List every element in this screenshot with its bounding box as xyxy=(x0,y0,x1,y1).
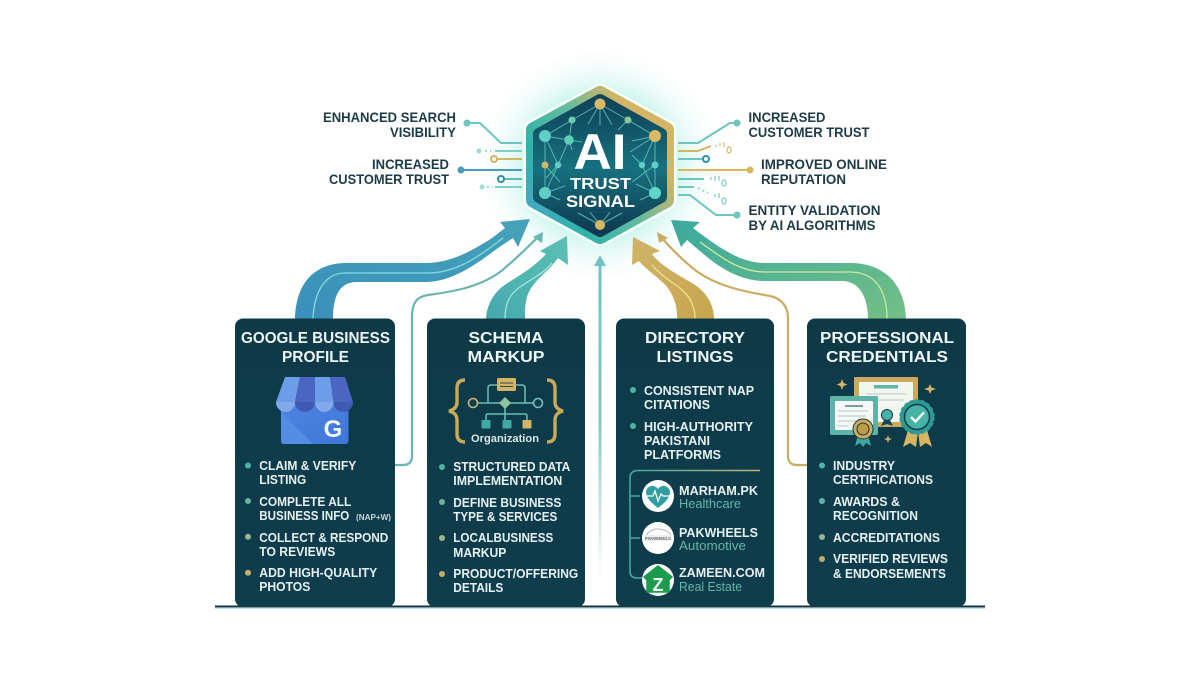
panel: Google Business Profile xyxy=(235,318,395,607)
left outcome labels: ENHANCED SEARCH xyxy=(323,109,456,125)
icon: Google storefront: G xyxy=(324,416,342,443)
arrow: thin gold connector to Credentials card xyxy=(657,232,807,465)
heading: CREDENTIALS xyxy=(826,349,948,366)
bullet list: PHOTOS xyxy=(259,579,311,594)
badge text: AI xyxy=(574,124,626,180)
heading: PROFILE xyxy=(282,349,349,366)
right outcome labels: INCREASED xyxy=(748,109,826,125)
bullet list: PLATFORMS xyxy=(644,447,721,462)
right outcome labels xyxy=(748,109,887,233)
bullet list: DEFINE BUSINESS xyxy=(453,495,562,510)
arrow: thin teal connector from Google card xyxy=(395,232,543,465)
panel: Professional Credentials xyxy=(807,318,966,607)
arrow: Directory Listings to hexagon xyxy=(632,237,714,319)
icon: Zameen logo: Z xyxy=(652,575,664,595)
icon: schema diagram xyxy=(449,378,563,445)
text: Zameen: ZAMEEN.COM xyxy=(679,565,765,580)
heading xyxy=(468,330,545,366)
bullet list: STRUCTURED DATA xyxy=(453,459,571,474)
panel: Schema Markup xyxy=(427,318,585,607)
right outcome labels: REPUTATION xyxy=(761,171,846,187)
text: Zameen xyxy=(679,565,765,594)
left outcome labels: CUSTOMER TRUST xyxy=(329,171,449,187)
right outcome labels: ENTITY VALIDATION xyxy=(748,202,880,218)
bullet list: CONSISTENT NAP xyxy=(644,383,754,398)
bullet list: ADD HIGH-QUALITY xyxy=(259,565,378,580)
left outcome labels xyxy=(323,109,457,187)
right circuit lines xyxy=(678,120,754,218)
heading: MARKUP xyxy=(468,349,545,366)
bullet list: INDUSTRY xyxy=(833,458,895,473)
arrow: Schema Markup to hexagon xyxy=(486,236,568,319)
bullet list xyxy=(439,459,578,595)
right outcome labels: CUSTOMER TRUST xyxy=(748,124,870,140)
left outcome labels: VISIBILITY xyxy=(390,124,457,140)
icon: Marham heart xyxy=(642,480,674,512)
bullet list xyxy=(630,383,754,462)
bullet list: CERTIFICATIONS xyxy=(833,472,933,487)
bullet list: TYPE & SERVICES xyxy=(453,509,558,524)
heading: SCHEMA xyxy=(468,330,544,347)
bullet list: COMPLETE ALL xyxy=(259,494,351,509)
right outcome labels: IMPROVED ONLINE xyxy=(761,156,887,172)
text: Marham: Healthcare xyxy=(679,496,741,511)
badge text xyxy=(566,124,635,211)
bullet list: BUSINESS INFO xyxy=(259,508,349,523)
bullet list: RECOGNITION xyxy=(833,508,918,523)
text: Marham xyxy=(679,483,759,511)
network nodes xyxy=(539,98,661,230)
badge text: SIGNAL xyxy=(566,193,635,211)
heading: DIRECTORY xyxy=(645,330,745,347)
bullet list: (NAP+W) xyxy=(356,513,391,522)
bullet list: LOCALBUSINESS xyxy=(453,530,554,545)
bullet list: HIGH-AUTHORITY xyxy=(644,419,753,434)
text: Marham: MARHAM.PK xyxy=(679,483,759,498)
central glow xyxy=(472,43,728,287)
left outcome labels: INCREASED xyxy=(372,156,449,172)
bullet list: LISTING xyxy=(259,472,306,487)
text: Zameen: Real Estate xyxy=(679,579,742,594)
platform bracket xyxy=(630,470,760,578)
bullet list: PAKISTANI xyxy=(644,433,710,448)
arrow: Google Business Profile to hexagon xyxy=(295,219,530,319)
bullet list: VERIFIED REVIEWS xyxy=(833,551,948,566)
bullet list: TO REVIEWS xyxy=(259,544,336,559)
heading: GOOGLE BUSINESS xyxy=(241,330,390,347)
panel: Directory Listings xyxy=(616,318,774,607)
icon: PakWheels logo xyxy=(642,522,674,554)
heading: PROFESSIONAL xyxy=(820,330,954,347)
arrow: Professional Credentials to hexagon xyxy=(671,220,906,319)
text: PakWheels: Automotive xyxy=(679,538,746,553)
bullet list xyxy=(245,458,391,594)
bullet list: PRODUCT/OFFERING xyxy=(453,566,578,581)
bullet list: CITATIONS xyxy=(644,397,710,412)
bullet list: ACCREDITATIONS xyxy=(833,530,940,545)
bullet list: DETAILS xyxy=(453,580,504,595)
bullet list: COLLECT & RESPOND xyxy=(259,530,388,545)
heading: LISTINGS xyxy=(656,349,734,366)
icon: Google storefront xyxy=(276,377,353,444)
bullet list: IMPLEMENTATION xyxy=(453,473,562,488)
bullet list: & ENDORSEMENTS xyxy=(833,566,946,581)
bullet list: MARKUP xyxy=(453,545,507,560)
text: PakWheels xyxy=(679,525,758,553)
baseline xyxy=(215,606,985,608)
icon: schema diagram: Organization xyxy=(471,433,539,445)
arrow: centre thin line xyxy=(594,255,606,578)
icon: Zameen logo xyxy=(642,564,674,596)
bullet list xyxy=(819,458,948,581)
bullet list: AWARDS & xyxy=(833,494,900,509)
bullet list: CLAIM & VERIFY xyxy=(259,458,357,473)
left circuit lines xyxy=(458,120,522,190)
icon: PakWheels logo: PAKWHEELS xyxy=(645,536,671,541)
right outcome labels: BY AI ALGORITHMS xyxy=(748,217,876,233)
heading xyxy=(241,330,390,366)
text: PakWheels: PAKWHEELS xyxy=(679,525,758,540)
icon: certificates and badges xyxy=(830,377,936,447)
badge text: TRUST xyxy=(570,176,631,193)
heading xyxy=(820,330,954,366)
hexagon badge: AI Trust Signal xyxy=(534,94,666,236)
heading xyxy=(645,330,745,366)
